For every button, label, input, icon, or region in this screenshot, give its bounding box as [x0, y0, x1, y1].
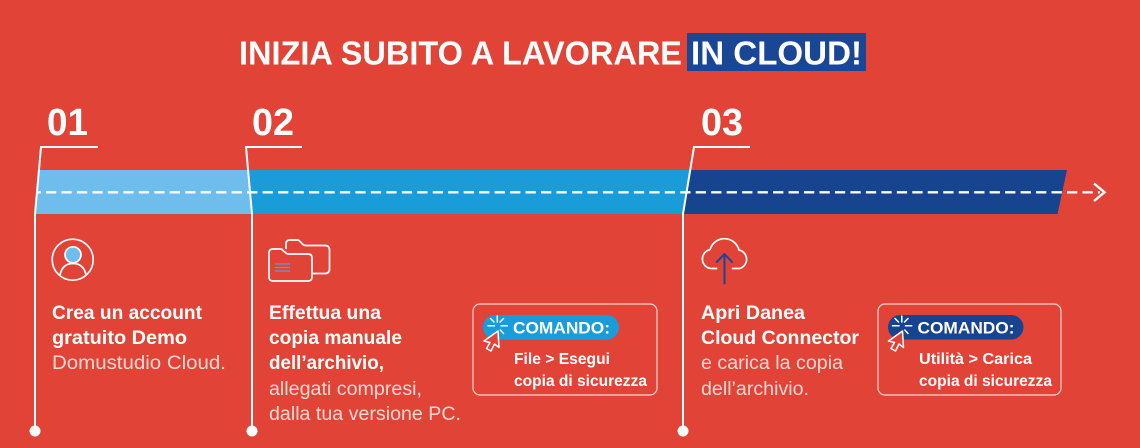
text: step 2	[269, 303, 461, 425]
command text: Utilità > Carica	[919, 351, 1032, 368]
text: step 3: Apri Danea	[701, 303, 805, 324]
command text: copia di sicurezza	[514, 373, 647, 390]
title: INIZIA SUBITO A LAVORARE	[239, 34, 682, 72]
number 01: 01	[47, 102, 88, 144]
band segment: step 2	[248, 170, 690, 214]
text: step 3: Cloud Connector	[701, 328, 860, 349]
text: step 3: e carica la copia	[701, 353, 843, 374]
text: step 2: allegati compresi,	[269, 379, 422, 400]
text: step 3	[701, 303, 860, 400]
icon: user account	[52, 239, 93, 280]
command text	[514, 351, 647, 390]
band segment: step 3	[683, 170, 1067, 214]
number 02: 02	[252, 102, 294, 144]
text: step 2: copia manuale	[269, 328, 402, 349]
text: step 2: dell’archivio,	[269, 353, 384, 374]
step 3 marker	[678, 102, 750, 436]
dashed arrow	[37, 184, 1104, 201]
command pill: COMANDO:	[918, 318, 1014, 338]
band segment: step 1	[35, 170, 252, 214]
step 1 marker	[30, 102, 98, 436]
text: step 1: Crea un account	[52, 303, 203, 324]
title	[239, 33, 866, 72]
command text: File > Esegui	[514, 351, 610, 368]
title: IN CLOUD!	[691, 34, 862, 72]
command pill: COMANDO:	[513, 318, 610, 338]
icon: cloud upload	[702, 239, 747, 284]
icon: click cursor	[484, 316, 507, 351]
step 2 marker	[246, 102, 302, 436]
text: step 3: dell’archivio.	[701, 379, 809, 400]
text: step 1	[52, 303, 226, 374]
callout: comando step 2	[473, 304, 657, 395]
icon: folders	[269, 240, 330, 281]
text: step 2: dalla tua versione PC.	[269, 404, 461, 425]
number 03: 03	[701, 102, 743, 144]
text: step 2: Effettua una	[269, 303, 381, 324]
command text: copia di sicurezza	[919, 373, 1052, 390]
timeline band	[35, 170, 1067, 214]
icon: click cursor	[888, 316, 912, 351]
command text	[919, 351, 1052, 390]
callout: comando step 3	[878, 304, 1061, 395]
command pill	[483, 315, 619, 340]
text: step 1: gratuito Demo	[52, 328, 187, 349]
command pill	[888, 315, 1024, 340]
text: step 1: Domustudio Cloud.	[52, 353, 226, 374]
